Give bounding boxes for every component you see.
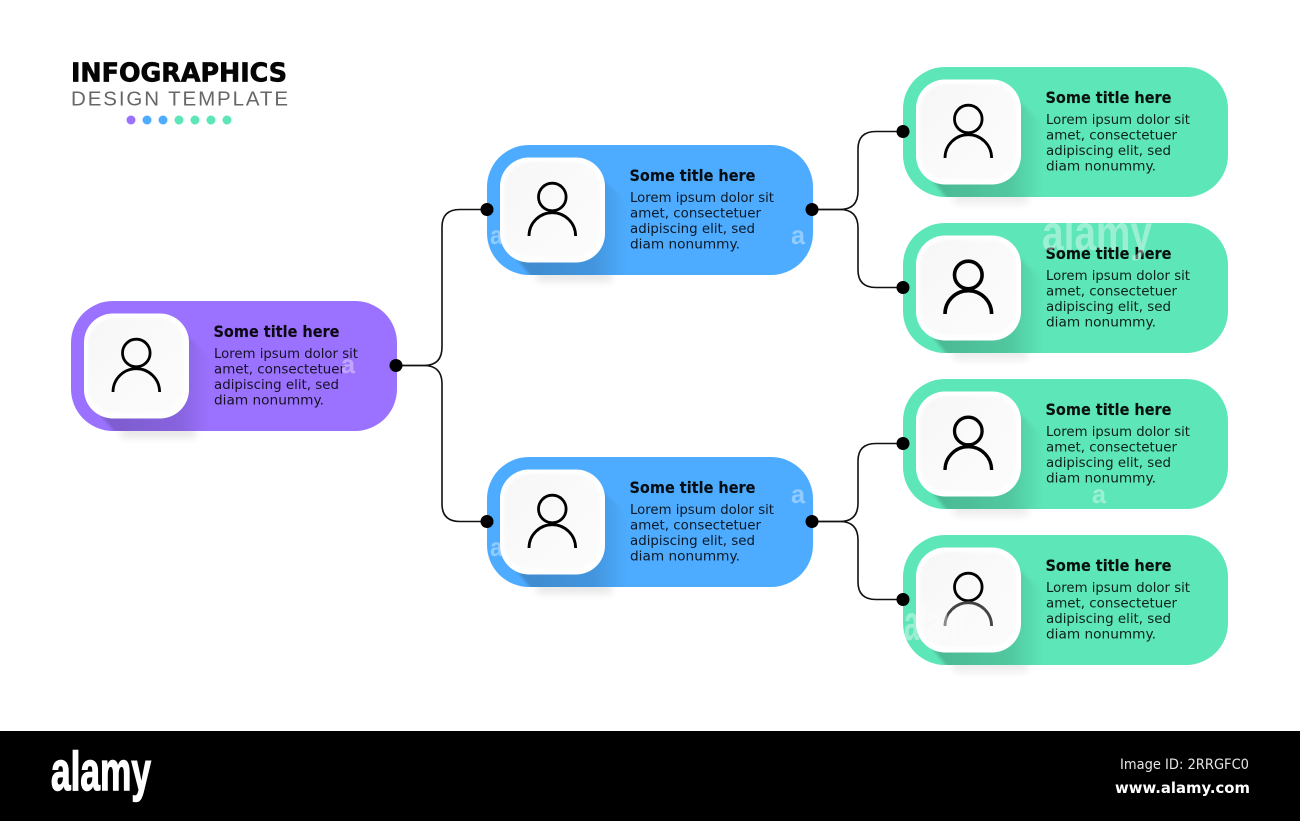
watermark fragments: a xyxy=(1092,479,1107,509)
watermark fragments: alamy xyxy=(1042,205,1152,261)
card text: Lorem ipsum dolor sit xyxy=(214,347,358,362)
card text xyxy=(1046,113,1190,174)
card text: Lorem ipsum dolor sit xyxy=(1046,113,1190,128)
panel: green card 3 xyxy=(903,379,1228,516)
panel: green card 2 xyxy=(903,223,1228,360)
card text: Lorem ipsum dolor sit xyxy=(630,191,774,206)
icon: person xyxy=(945,573,992,626)
card text: diam nonummy. xyxy=(1046,472,1156,486)
panel: green card 1 xyxy=(903,67,1228,204)
title block xyxy=(71,58,288,124)
watermark fragments: a xyxy=(490,220,503,250)
connector: top blue to green cards xyxy=(806,125,910,294)
card text: diam nonummy. xyxy=(1046,628,1156,642)
decorative dots xyxy=(126,116,232,124)
card text: amet, consectetuer xyxy=(1046,440,1178,456)
card title: Some title here xyxy=(1046,88,1172,107)
watermark fragments: a xyxy=(341,349,356,379)
watermark fragments: alam xyxy=(904,595,966,651)
card text xyxy=(630,503,774,564)
card text: amet, consectetuer xyxy=(630,206,762,222)
connector: root to blue cards xyxy=(390,203,494,528)
panel: blue card top xyxy=(487,145,813,282)
card text: amet, consectetuer xyxy=(1046,284,1178,300)
card title: Some title here xyxy=(1046,400,1172,419)
card text xyxy=(1046,269,1190,330)
footer band xyxy=(0,731,1300,821)
panel: root card purple xyxy=(71,301,397,438)
connector: bottom blue to green cards xyxy=(806,437,910,606)
card text xyxy=(214,347,358,408)
icon: person xyxy=(945,417,992,470)
watermark fragments: a xyxy=(791,220,806,250)
card title: Some title here xyxy=(1046,244,1172,263)
card text: Lorem ipsum dolor sit xyxy=(630,503,774,518)
card title: Some title here xyxy=(214,322,340,341)
card text: diam nonummy. xyxy=(214,394,324,408)
watermark fragments: a xyxy=(490,532,503,562)
website: www.alamy.com xyxy=(1115,779,1250,797)
card text: diam nonummy. xyxy=(1046,160,1156,174)
card text xyxy=(1046,425,1190,486)
card text: adipiscing elit, sed xyxy=(1046,144,1171,159)
card text: adipiscing elit, sed xyxy=(630,222,755,237)
card text: diam nonummy. xyxy=(630,238,740,252)
card text: Lorem ipsum dolor sit xyxy=(1046,269,1190,284)
icon: person xyxy=(529,183,576,236)
card text: Lorem ipsum dolor sit xyxy=(1046,425,1190,440)
icon: person xyxy=(945,105,992,158)
card text: adipiscing elit, sed xyxy=(1046,456,1171,471)
card text: diam nonummy. xyxy=(1046,316,1156,330)
heading: INFOGRAPHICS xyxy=(71,58,287,88)
card text xyxy=(630,191,774,252)
card text: adipiscing elit, sed xyxy=(214,378,339,393)
watermark fragments: a xyxy=(791,479,806,509)
card text: Lorem ipsum dolor sit xyxy=(1046,581,1190,596)
card text: diam nonummy. xyxy=(630,550,740,564)
panel: green card 4 xyxy=(903,535,1228,672)
icon: person xyxy=(113,339,160,392)
subheading: DESIGN TEMPLATE xyxy=(71,88,288,110)
card title: Some title here xyxy=(630,166,756,185)
card text: amet, consectetuer xyxy=(214,362,346,378)
card text: adipiscing elit, sed xyxy=(1046,300,1171,315)
card text: amet, consectetuer xyxy=(1046,128,1178,144)
card title: Some title here xyxy=(630,478,756,497)
card title: Some title here xyxy=(1046,556,1172,575)
image id: Image ID: 2RRGFC0 xyxy=(1120,757,1249,773)
footer logo: alamy xyxy=(51,740,151,802)
card text xyxy=(1046,581,1190,642)
panel: blue card bottom xyxy=(487,457,813,594)
watermark fragments xyxy=(341,205,1152,651)
card text: adipiscing elit, sed xyxy=(1046,612,1171,627)
icon: person xyxy=(529,495,576,548)
card text: amet, consectetuer xyxy=(630,518,762,534)
card text: amet, consectetuer xyxy=(1046,596,1178,612)
icon: person xyxy=(945,261,992,314)
card text: adipiscing elit, sed xyxy=(630,534,755,549)
